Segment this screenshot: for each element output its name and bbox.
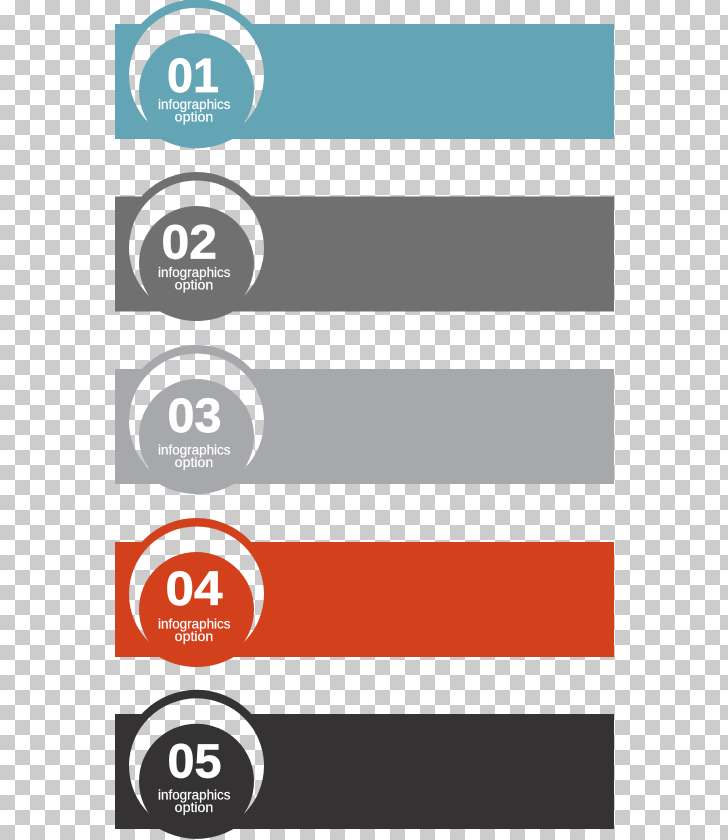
- ring 02: [122, 172, 271, 321]
- label 02: infographics: [158, 264, 230, 280]
- panel: option 05: [115, 690, 614, 839]
- number 01: 01: [167, 50, 219, 103]
- label 04: option: [175, 628, 213, 644]
- label 01: infographics: [158, 96, 230, 112]
- number 03: 03: [168, 390, 222, 443]
- panel: option 02: [115, 172, 614, 321]
- badge circle 01: [139, 33, 254, 148]
- badge circle 05: [139, 724, 254, 839]
- panel: option 01: [115, 0, 614, 148]
- panel: option 03: [115, 345, 614, 494]
- label 03: infographics: [158, 442, 230, 458]
- panel: option 04: [115, 518, 614, 667]
- bar 01: [115, 24, 614, 139]
- ring 03: [122, 345, 271, 494]
- badge circle 03: [139, 379, 254, 494]
- number 05: 05: [168, 736, 222, 788]
- label 03: option: [175, 454, 213, 470]
- label 05: option: [175, 799, 213, 815]
- label 01: option: [175, 108, 213, 124]
- ring 01: [122, 0, 271, 148]
- badge circle 02: [139, 206, 254, 321]
- ring 04: [122, 518, 271, 667]
- number 02: 02: [162, 216, 217, 270]
- label 04: infographics: [158, 616, 230, 632]
- ring 05: [122, 690, 271, 839]
- bar 04: [115, 542, 614, 657]
- bar 05: [115, 714, 614, 829]
- label 02: option: [175, 276, 213, 292]
- badge circle 04: [139, 552, 254, 667]
- bar 02: [115, 196, 614, 312]
- bar 03: [115, 369, 614, 484]
- label 05: infographics: [158, 786, 230, 802]
- number 04: 04: [166, 563, 223, 616]
